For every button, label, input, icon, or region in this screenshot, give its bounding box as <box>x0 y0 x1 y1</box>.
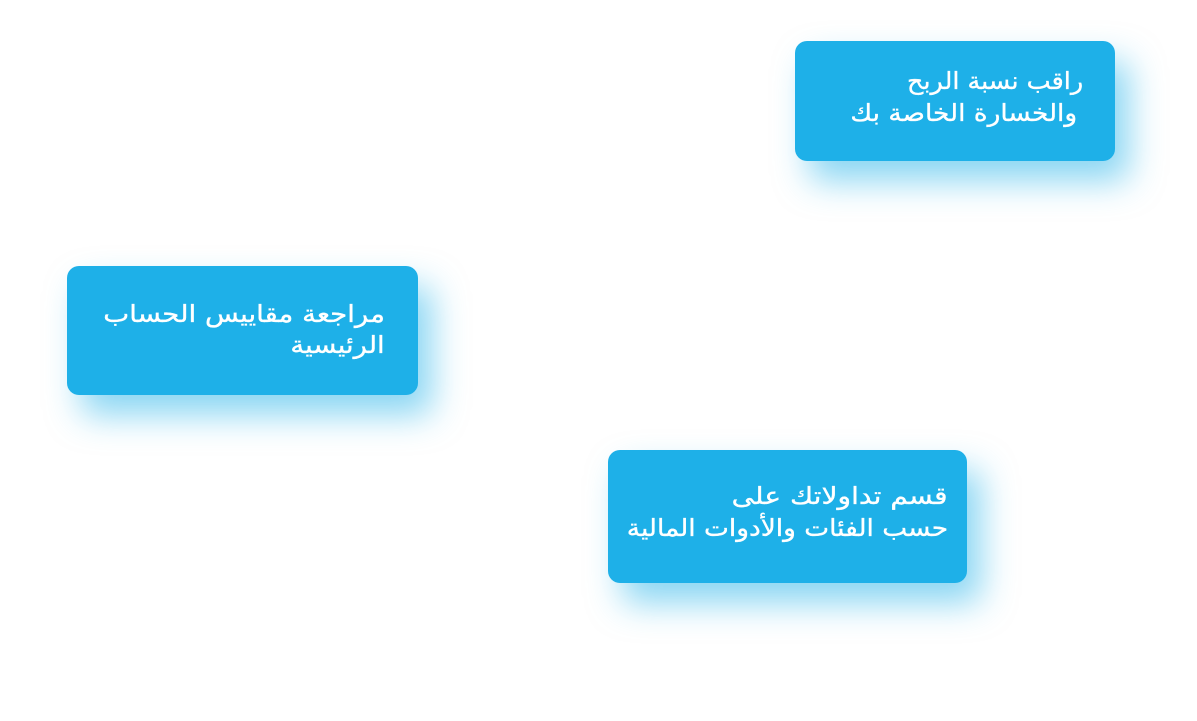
panel: monitor profit and loss ratio <box>795 41 1115 161</box>
text line: by categories and financial instruments: حسب الفئات والأدوات المالية <box>627 514 948 542</box>
text line: divide your trades: قسم تداولاتك على <box>732 482 948 510</box>
text line: review account metrics: مراجعة مقاييس الحساب <box>103 300 385 328</box>
text line: monitor profit ratio: راقب نسبة الربح <box>907 67 1083 95</box>
panel: review key account metrics <box>67 266 418 395</box>
text line: and your loss: والخسارة الخاصة بك <box>850 99 1077 127</box>
panel: divide trades by category and instrument <box>608 450 967 583</box>
text line: key: الرئيسية <box>291 331 385 359</box>
